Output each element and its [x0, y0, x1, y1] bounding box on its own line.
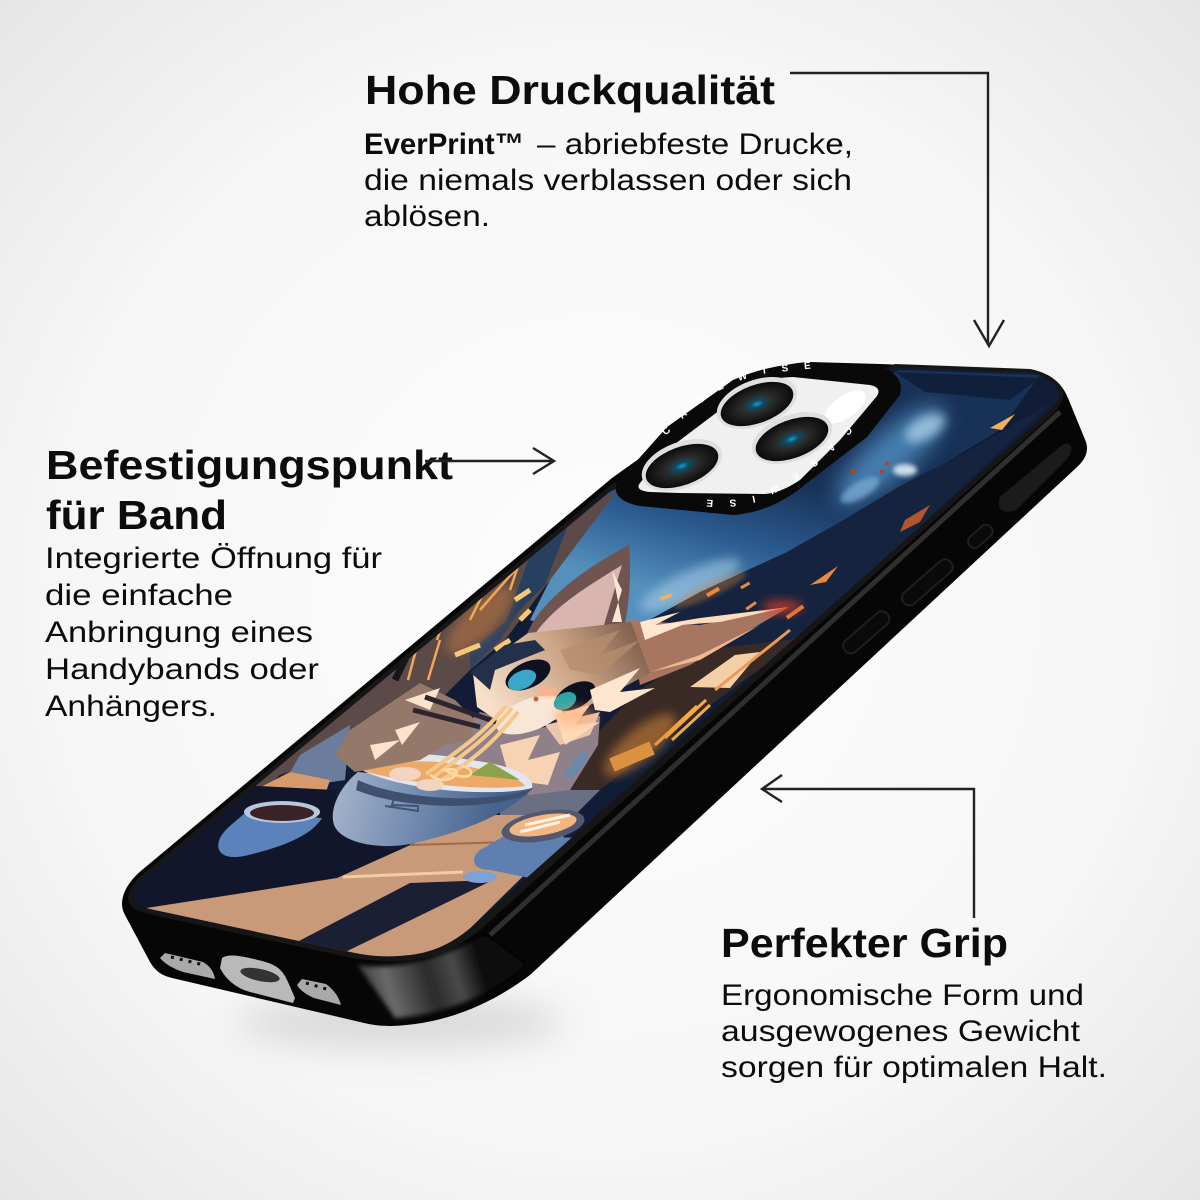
bump frame [616, 363, 901, 515]
floor shadow under phone [235, 996, 565, 1048]
body text: sorgen für optimalen Halt. [721, 1051, 1107, 1084]
heading: Hohe Druckqualität [365, 67, 775, 113]
body text: Ergonomische Form und [721, 979, 1084, 1012]
case body [122, 362, 1087, 1026]
volume up [899, 556, 956, 608]
body text: die einfache [45, 579, 233, 612]
lit street right of cat [500, 628, 799, 815]
left cup [218, 801, 322, 857]
brand text top: CASEWISE [662, 362, 811, 434]
dark table [134, 786, 402, 908]
dark skyline [640, 402, 1052, 650]
callout: grip [721, 920, 1107, 1084]
corner highlight [358, 935, 525, 1018]
noodles [426, 706, 518, 780]
ramen bowl [333, 754, 533, 846]
heading: für Band [46, 492, 227, 538]
cat face [473, 622, 650, 720]
chopsticks [413, 697, 496, 727]
right speaker [297, 979, 341, 1005]
lens top [710, 367, 804, 439]
body text: ausgewogenes Gewicht [721, 1015, 1081, 1048]
cat ear left [527, 545, 630, 634]
body text: Anbringung eines [45, 616, 313, 649]
table cast shadow [297, 880, 493, 956]
body text: Anhängers. [45, 690, 217, 723]
mute button [966, 522, 995, 551]
side buttons [840, 444, 1071, 656]
body text: – abriebfeste Drucke, [537, 128, 853, 161]
artwork base [276, 368, 1060, 928]
camera bump [616, 362, 901, 515]
glare [819, 384, 871, 430]
body text [721, 979, 1107, 1084]
cat ear right [628, 607, 789, 685]
clouds and glow [634, 372, 1040, 621]
heading: Perfekter Grip [721, 920, 1008, 966]
city sparks [660, 414, 1015, 619]
lens left [635, 429, 729, 501]
sky [530, 370, 1040, 640]
case rim around back face [128, 364, 1064, 961]
peach table surface [140, 815, 570, 962]
body text: EverPrint™ [364, 128, 524, 161]
right cup [463, 804, 587, 883]
cat eyes [506, 660, 596, 711]
callout: strap attachment [45, 442, 453, 723]
phone with printed case [122, 362, 1087, 1026]
body text [364, 128, 853, 233]
heading: Befestigungspunkt [46, 442, 453, 488]
volume down [840, 608, 892, 656]
cat body fur [429, 712, 600, 795]
arrow: to top edge [790, 73, 1004, 346]
brand text bottom: CASEWISE [706, 428, 852, 507]
red spark [762, 600, 802, 614]
arrow: to grip side [762, 775, 974, 918]
warm buildings behind cat [130, 490, 618, 880]
callout: print quality [364, 67, 853, 233]
left speaker [160, 953, 215, 979]
cat arm [335, 683, 475, 772]
charging port [220, 956, 295, 1003]
body text [45, 542, 382, 723]
inner glass [638, 377, 879, 494]
case side band highlight [490, 412, 1060, 935]
body text: die niemals verblassen oder sich [364, 164, 852, 197]
printed artwork [134, 368, 1060, 956]
body text: Handybands oder [45, 653, 319, 686]
lens right [745, 402, 839, 474]
side switch recess [999, 444, 1071, 512]
heading [46, 442, 453, 538]
arrow: to strap point [425, 448, 554, 474]
body text: ablösen. [364, 200, 490, 233]
glowing fur highlights [538, 570, 690, 745]
body text: Integrierte Öffnung für [45, 542, 382, 575]
